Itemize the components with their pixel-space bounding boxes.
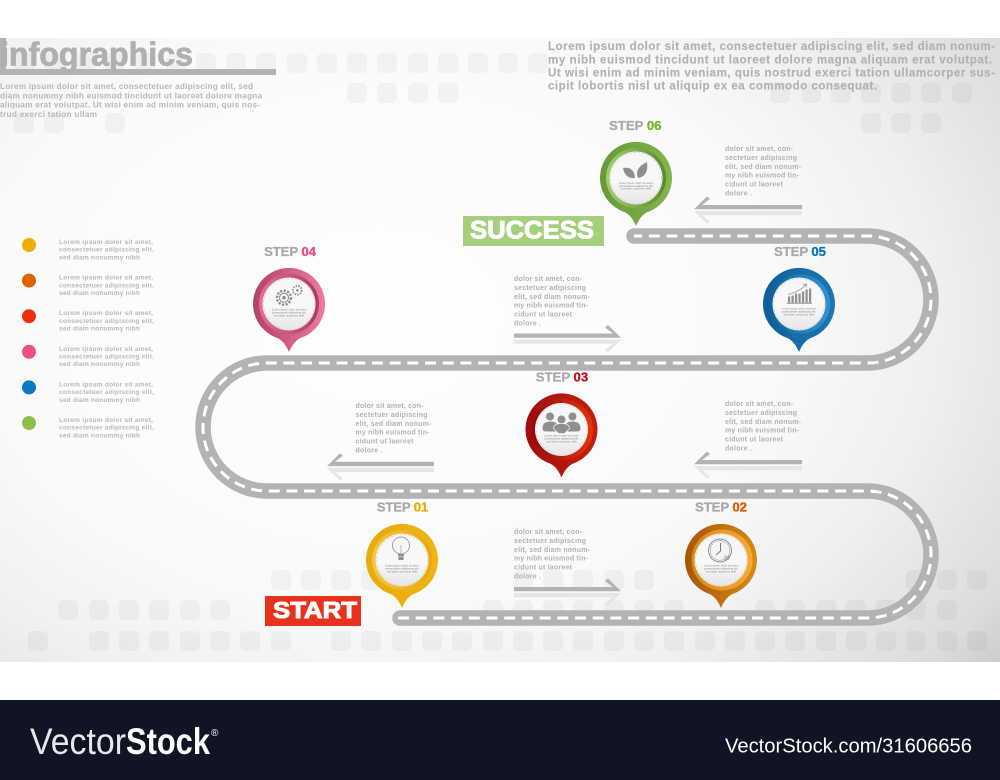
- text block: step 04: cidunt ut laoreet: [514, 312, 573, 318]
- legend item 1: consectetuer adipiscing elit,: [59, 247, 154, 254]
- step 05 label: STEP 05: [774, 244, 826, 259]
- arrow: step 04 right: [514, 325, 621, 352]
- legend item 3: Lorem ipsum dolor sit amet,: [59, 310, 153, 317]
- legend item 5: sed diam nonummy nibh: [59, 397, 140, 404]
- arrow: step 05 left: [694, 452, 802, 479]
- legend item 1: Lorem ipsum dolor sit amet,: [59, 239, 153, 246]
- intro paragraph left: [0, 82, 262, 119]
- footer logo: Vector: [30, 721, 126, 762]
- icon: leaves: [623, 162, 647, 178]
- text block: step 05: my nibh euismod tin-: [725, 428, 800, 435]
- intro paragraph right: cipit lobortis nisl ut aliquip ex ea commodo consequat.: [548, 79, 877, 92]
- legend item 1: [22, 238, 154, 261]
- winding road: [203, 236, 931, 618]
- success label: SUCCESS: [470, 216, 594, 244]
- legend item 6: [22, 416, 154, 439]
- icon: people: [542, 412, 580, 434]
- legend item 2: [22, 274, 154, 297]
- legend item 2: Lorem ipsum dolor sit amet,: [59, 275, 153, 282]
- intro paragraph left: aliquam erat volutpat. Ut wisi enim ad minim veniam, quis nos-: [0, 101, 260, 110]
- text block: step 05: dolor sit amet, con-: [725, 401, 794, 408]
- step 02 pin: [685, 524, 757, 608]
- icon: light bulb: [392, 537, 410, 560]
- step 01 pin: [366, 524, 438, 608]
- step 05 pin: sed diam nonummy nibh: [784, 312, 815, 316]
- text block: step 04: dolore .: [514, 320, 541, 327]
- step 02 pin: sed diam nonummy nibh: [706, 570, 737, 574]
- gradient panel: [0, 38, 1000, 662]
- background pattern of rounded squares: [14, 53, 987, 651]
- text block: step 01: cidunt ut laoreet: [514, 564, 573, 572]
- text block: step 03: elit, sed diam nonum-: [356, 421, 432, 428]
- text block: step 05: [725, 401, 802, 452]
- legend item 4: sed diam nonummy nibh: [59, 361, 140, 368]
- text block: step 05: elit, sed diam nonum-: [725, 419, 802, 426]
- intro paragraph left: trud exerci tation ullam: [0, 110, 97, 119]
- arrow: step 06 left: [694, 196, 802, 224]
- infographic body: [0, 36, 995, 626]
- step 04 pin: [253, 268, 325, 352]
- step 02 pin: Lorem ipsum dolor sit amet,: [704, 564, 738, 568]
- step 05 pin: consectetuer adipiscing elit,: [782, 310, 816, 314]
- intro paragraph right: Ut wisi enim ad minim veniam, quis nostrud exerci tation ullamcorper sus-: [548, 66, 995, 80]
- footer bar: [0, 700, 1000, 780]
- step 03 label: STEP 03: [536, 370, 588, 385]
- step 01 pin: Lorem ipsum dolor sit amet,: [385, 564, 419, 568]
- start label: START: [273, 597, 358, 623]
- text block: step 03: dolor sit amet, con-: [356, 403, 424, 410]
- text block: step 03: sectetuer adipiscing: [356, 412, 428, 419]
- legend item 3: sed diam nonummy nibh: [59, 326, 140, 333]
- icon: bar chart: [787, 284, 812, 304]
- text block: step 04: my nibh euismod tin-: [514, 303, 589, 310]
- step 03 pin: [526, 393, 598, 478]
- title: infographics: [0, 36, 193, 72]
- legend item 5: consectetuer adipiscing elit,: [59, 389, 154, 396]
- step 01 pin: sed diam nonummy nibh: [387, 570, 418, 574]
- arrow: step 01 right: [514, 578, 621, 606]
- text block: step 01: [514, 529, 591, 580]
- step 04 pin: consectetuer adipiscing elit,: [272, 310, 306, 314]
- text block: step 06: my nibh euismod tin-: [725, 173, 800, 180]
- text block: step 03: my nibh euismod tin-: [356, 430, 430, 437]
- step 06 pin: [600, 142, 672, 226]
- intro paragraph left: Lorem ipsum dolor sit amet, consectetuer adipiscing elit, sed: [0, 82, 253, 91]
- legend item 4: Lorem ipsum dolor sit amet,: [59, 346, 153, 353]
- text block: step 05: sectetuer adipiscing: [725, 410, 797, 417]
- text block: step 04: [514, 276, 591, 327]
- legend item 4: [22, 345, 154, 368]
- text block: step 01: my nibh euismod tin-: [514, 556, 589, 563]
- text block: step 04: dolor sit amet, con-: [514, 276, 583, 283]
- intro paragraph right: my nibh euismod tincidunt ut laoreet dolore magna aliquam erat volutpat.: [548, 53, 992, 66]
- intro paragraph left: diam nonummy nibh euismod tincidunt ut laoreet dolore magna: [0, 91, 262, 100]
- step 02 pin: consectetuer adipiscing elit,: [704, 566, 738, 570]
- step 01 pin: consectetuer adipiscing elit,: [385, 566, 419, 570]
- step 02 label: STEP 02: [695, 500, 747, 515]
- text block: step 03: cidunt ut laoreet: [356, 438, 414, 446]
- legend item 3: [22, 309, 154, 333]
- step 05 pin: Lorem ipsum dolor sit amet,: [782, 306, 816, 310]
- legend item 4: consectetuer adipiscing elit,: [59, 354, 154, 360]
- intro paragraph right: [548, 40, 995, 92]
- text block: step 06: [725, 146, 802, 197]
- step 06 pin: Lorem ipsum dolor sit amet,: [619, 181, 653, 185]
- footer image id: VectorStock.com/31606656: [725, 736, 972, 758]
- legend: [22, 238, 154, 439]
- footer logo: [30, 721, 219, 762]
- text block: step 01: dolore .: [514, 573, 541, 580]
- step 03 pin: consectetuer adipiscing elit,: [544, 436, 579, 440]
- text block: step 05: cidunt ut laoreet: [725, 436, 784, 444]
- text block: step 01: elit, sed diam nonum-: [514, 547, 591, 554]
- text block: step 06: cidunt ut laoreet: [725, 182, 784, 188]
- text block: step 04: sectetuer adipiscing: [514, 285, 586, 292]
- step 05 pin: [763, 268, 835, 352]
- text block: step 01: dolor sit amet, con-: [514, 529, 583, 536]
- legend item 5: [22, 380, 154, 404]
- step 03 pin: sed diam nonummy nibh: [546, 440, 577, 444]
- icon: gears: [277, 286, 302, 305]
- legend item 6: sed diam nonummy nibh: [59, 432, 140, 439]
- step 03 pin: Lorem ipsum dolor sit amet,: [544, 434, 579, 438]
- text block: step 04: elit, sed diam nonum-: [514, 294, 591, 301]
- legend item 2: sed diam nonummy nibh: [59, 290, 140, 297]
- text block: step 01: sectetuer adipiscing: [514, 538, 586, 545]
- legend item 5: Lorem ipsum dolor sit amet,: [59, 381, 153, 388]
- legend item 2: consectetuer adipiscing elit,: [59, 282, 154, 289]
- step 04 pin: sed diam nonummy nibh: [274, 314, 305, 318]
- step 06 label: STEP 06: [609, 118, 662, 133]
- legend item 6: consectetuer adipiscing elit,: [59, 425, 154, 432]
- text block: step 06: dolor sit amet, con-: [725, 146, 794, 153]
- text block: step 06: dolore .: [725, 190, 752, 197]
- step 04 pin: Lorem ipsum dolor sit amet,: [272, 308, 306, 312]
- text block: step 06: elit, sed diam nonum-: [725, 164, 802, 171]
- title bracket: [0, 38, 276, 75]
- icon: clock: 24: [724, 556, 730, 562]
- step 06 pin: sed diam nonummy nibh: [621, 186, 652, 190]
- step 01 label: STEP 01: [377, 500, 428, 515]
- intro paragraph right: Lorem ipsum dolor sit amet, consectetuer adipiscing elit, sed diam nonum-: [548, 40, 995, 53]
- title block: [0, 36, 276, 75]
- arrow: step 03 left: [327, 453, 434, 481]
- legend item 1: sed diam nonummy nibh: [59, 254, 140, 261]
- start label: [265, 596, 361, 626]
- step 04 label: STEP 04: [264, 244, 317, 259]
- footer logo: ®: [211, 728, 219, 739]
- legend item 6: Lorem ipsum dolor sit amet,: [59, 417, 153, 424]
- footer logo: Stock: [126, 721, 210, 762]
- step 06 pin: consectetuer adipiscing elit,: [619, 184, 653, 188]
- text block: step 06: sectetuer adipiscing: [725, 155, 797, 162]
- text block: step 03: [356, 403, 432, 454]
- text block: step 03: dolore .: [356, 447, 383, 454]
- text block: step 05: dolore .: [725, 445, 752, 452]
- legend item 3: consectetuer adipiscing elit,: [59, 318, 154, 325]
